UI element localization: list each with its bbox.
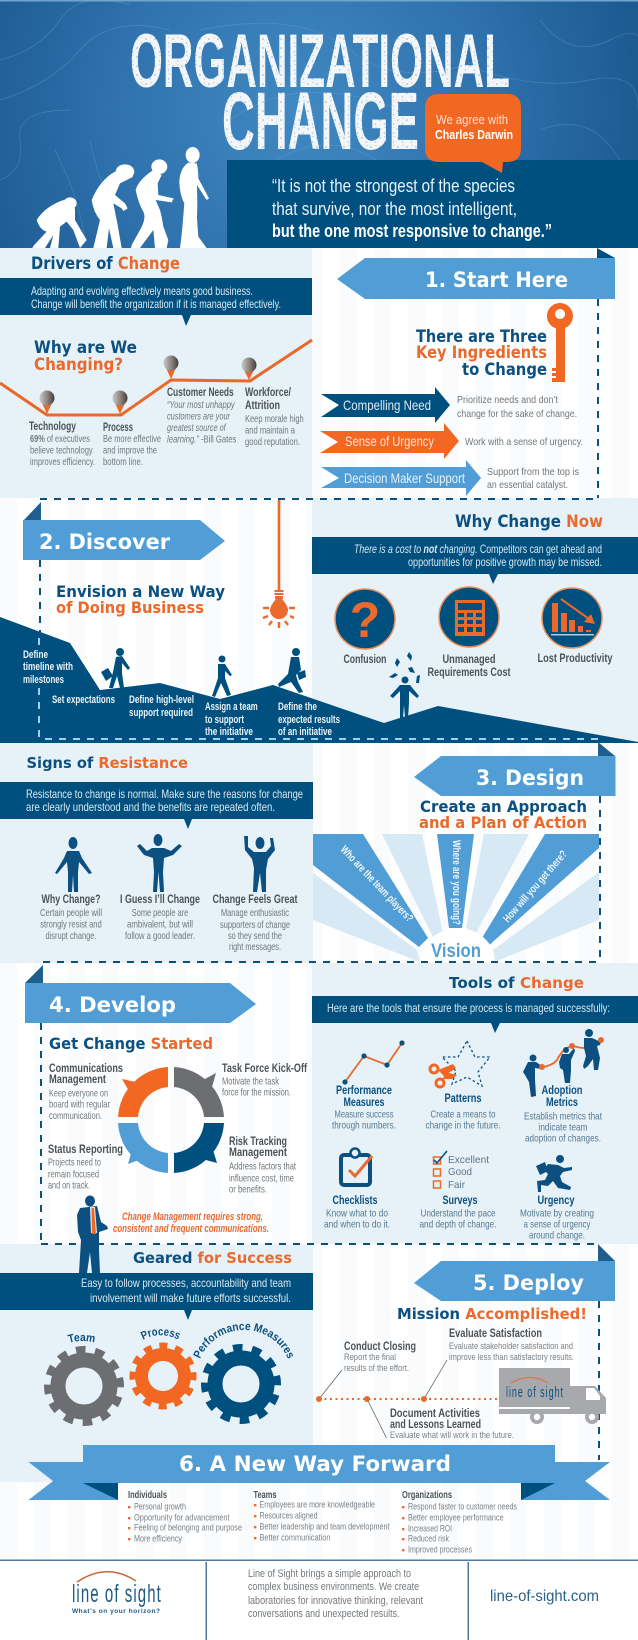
- text: about line of sight: Line of Sight brings a simple approach to: [248, 1568, 411, 1580]
- icon: survey checkboxes: [434, 1151, 489, 1191]
- heading: get change started: Get Change Started: [49, 1034, 213, 1053]
- ray label: team players: Who are the team players?: [338, 844, 415, 925]
- icon: confusion question mark: ?: [350, 592, 380, 648]
- driver: technology: believe technology: [30, 444, 93, 456]
- heading: create an approach: and a Plan of Action: [419, 813, 587, 832]
- icon: scissors and dashed star: [430, 1041, 490, 1087]
- speech bubble: charles darwin: [425, 94, 521, 173]
- heading: geared for success: Geared for Success: [133, 1249, 292, 1267]
- label: unmanaged requirements cost: Unmanaged: [442, 652, 496, 666]
- text: adoption metrics: [524, 1083, 602, 1144]
- quote box: “It is not the strongest of the species: [272, 176, 515, 196]
- text: performance measures: Measures: [344, 1095, 385, 1109]
- driver: workforce attrition: Attrition: [245, 398, 280, 412]
- speech bubble: charles darwin: Charles Darwin: [435, 127, 513, 142]
- donut cycle diagram: [118, 1067, 224, 1173]
- icon: survey checkboxes: Excellent: [448, 1154, 489, 1166]
- text: adoption metrics: Adoption: [542, 1083, 582, 1097]
- list: teams: [254, 1489, 390, 1544]
- icon: evolution of man silhouettes: [32, 147, 209, 248]
- icon: calculator: [439, 587, 499, 647]
- driver: technology: 69% of executives: [30, 433, 90, 445]
- icon: gray gear: [41, 1343, 127, 1429]
- text: conduct closing: Report the final: [344, 1352, 396, 1363]
- panel: drivers of change: [0, 254, 312, 468]
- heading: why are we changing: Changing?: [34, 355, 123, 374]
- text: about line of sight: [248, 1568, 423, 1620]
- arrow: sense of urgency: Sense of Urgency: [345, 433, 434, 449]
- quote box: [227, 160, 638, 248]
- text: conduct closing: [344, 1339, 416, 1374]
- step labels: to support: [205, 714, 244, 726]
- ray label: where are you going: Where are you going?: [450, 840, 462, 925]
- list: individuals: [128, 1489, 242, 1544]
- text: task force kick-off: Motivate the task: [222, 1076, 280, 1088]
- text: risk tracking management: influence cost, time: [229, 1172, 294, 1184]
- list: individuals: Feeling of belonging and purpose: [134, 1522, 242, 1534]
- heading: three key ingredients: to Change: [462, 360, 547, 379]
- banner: 6. a new way forward: 6. A New Way Forward: [179, 1452, 451, 1477]
- text: evaluate satisfaction: improve less than satisfactory results.: [449, 1352, 574, 1363]
- text: why change: Certain people will: [40, 907, 102, 919]
- panel: tools of change: [312, 974, 638, 1242]
- text: status reporting: and on track.: [48, 1180, 90, 1192]
- step labels: Assign a team: [205, 701, 258, 713]
- intro band: Change will benefit the organization if it is managed effectively.: [31, 297, 281, 311]
- text: change feels great: supporters of change: [220, 919, 290, 931]
- text: surveys: [420, 1193, 496, 1230]
- intro band: Adapting and evolving effectively means good business.: [31, 284, 253, 298]
- panel: step 4 develop: [25, 965, 308, 1244]
- text: status reporting: Status Reporting: [48, 1142, 123, 1156]
- step labels: of an initiative: [278, 726, 332, 738]
- label: lost productivity: Lost Productivity: [538, 651, 613, 665]
- text: performance measures: Performance: [336, 1083, 392, 1097]
- text: evaluate satisfaction: Evaluate stakeholder satisfaction and: [449, 1341, 573, 1352]
- driver: process: bottom line.: [103, 456, 143, 468]
- banner: 4. develop: [25, 965, 256, 1023]
- intro band: Easy to follow processes, accountability and team: [81, 1276, 291, 1290]
- step labels: milestones: [23, 674, 64, 686]
- list: organizations: Better employee performance: [408, 1512, 504, 1524]
- line chart: drivers path with pins: [0, 340, 312, 415]
- text: change feels great: [212, 892, 298, 953]
- text: surveys: Understand the pace: [420, 1208, 496, 1220]
- callout: change management requires: consistent and frequent communications.: [113, 1223, 269, 1235]
- text: risk tracking management: [229, 1134, 296, 1196]
- text: urgency: Motivate by creating: [520, 1208, 594, 1220]
- label: confusion: Confusion: [344, 652, 386, 666]
- speech bubble: charles darwin: We agree with: [436, 112, 508, 127]
- text: checklists: [324, 1193, 390, 1230]
- text: patterns: [426, 1091, 500, 1132]
- text: i guess ill change: I Guess I’ll Change: [120, 892, 200, 906]
- banner: 6. a new way forward: [28, 1445, 610, 1500]
- text: adoption metrics: Metrics: [546, 1095, 578, 1109]
- list: organizations: Organizations: [402, 1489, 452, 1501]
- text: about line of sight: laboratories for innovative thinking, relevant: [248, 1595, 423, 1607]
- text: communications management: Management: [49, 1072, 106, 1086]
- arrow: compelling need: Prioritize needs and don’t: [457, 394, 558, 406]
- heading: mission accomplished: Mission Accomplished!: [397, 1305, 587, 1323]
- step labels: Define the: [278, 701, 317, 713]
- panel: step 2 discover: [0, 500, 638, 743]
- heading: why change now: Why Change Now: [455, 512, 603, 531]
- text: why change: disrupt change.: [46, 930, 96, 942]
- step labels: expected results: [278, 714, 340, 726]
- driver: customer needs: “Your most unhappy: [167, 399, 235, 411]
- text: status reporting: remain focused: [48, 1168, 99, 1180]
- icon: survey checkboxes: Fair: [448, 1179, 465, 1191]
- text: i guess ill change: Some people are: [132, 907, 188, 919]
- text: i guess ill change: [120, 892, 200, 942]
- title: change: CHANGE: [222, 76, 419, 167]
- heading: why are we changing: [34, 338, 137, 374]
- icon: orange gear: [130, 1343, 196, 1409]
- panel: geared for success: [0, 1249, 313, 1426]
- text: performance measures: Measure success: [334, 1108, 394, 1120]
- intro band: [0, 1273, 313, 1320]
- text: adoption metrics: adoption of changes.: [525, 1132, 601, 1144]
- text: communications management: [49, 1061, 123, 1122]
- driver: customer needs: learning.” -Bill Gates: [167, 434, 236, 446]
- text: why change: strongly resist and: [40, 918, 102, 930]
- text: about line of sight: conversations and unexpected results.: [248, 1608, 400, 1620]
- icon: truck with logo: line of sight: [506, 1384, 563, 1401]
- text: checklists: Know what to do: [326, 1208, 388, 1220]
- driver: workforce attrition: Workforce/: [245, 385, 291, 399]
- banner: 5. deploy: 5. Deploy: [473, 1271, 584, 1295]
- text: change feels great: Change Feels Great: [212, 892, 298, 906]
- text: change feels great: right messages.: [229, 941, 281, 953]
- driver: process: Process: [103, 420, 133, 434]
- icon: figures pulling rope: [523, 1029, 604, 1097]
- text: why change: Why Change?: [42, 892, 100, 906]
- icon: juggling person: [389, 652, 420, 718]
- logo: line of sight: [72, 1572, 161, 1615]
- quote box: that survive, nor the most intelligent,: [272, 199, 517, 219]
- text: patterns: Create a means to: [430, 1108, 496, 1120]
- banner: 3. design: 3. Design: [476, 766, 584, 790]
- text: patterns: change in the future.: [426, 1120, 500, 1132]
- icon: businessman presenting: [77, 1196, 108, 1273]
- step labels: [23, 649, 340, 738]
- text: document activities: [390, 1406, 514, 1441]
- heading: envision a new way: of Doing Business: [56, 598, 204, 617]
- arrow: compelling need: [321, 387, 577, 423]
- mountain path with steps: [0, 617, 638, 743]
- list: teams: Resources aligned: [260, 1510, 318, 1522]
- text: about line of sight: complex business environments. We create: [248, 1581, 419, 1593]
- text: risk tracking management: Risk Tracking: [229, 1134, 287, 1148]
- text: task force kick-off: force for the mission.: [222, 1086, 291, 1098]
- text: evaluate satisfaction: Evaluate Satisfaction: [449, 1326, 542, 1340]
- logo: line of sight: line of sight: [72, 1580, 161, 1608]
- icon: figure ambivalent: [137, 834, 182, 892]
- heading: three key ingredients: There are Three: [416, 327, 547, 346]
- banner: 3. design: [414, 742, 616, 796]
- label: unmanaged requirements cost: [428, 652, 510, 679]
- heading: three key ingredients: Key Ingredients: [416, 343, 547, 362]
- text: communications management: Keep everyone on: [49, 1088, 108, 1100]
- step labels: the initiative: [205, 726, 253, 738]
- driver: technology: Technology: [29, 419, 76, 433]
- intro band: [312, 996, 638, 1033]
- text: risk tracking management: or benefits.: [229, 1184, 267, 1196]
- footer: [0, 1560, 638, 1640]
- list: organizations: Respond faster to customer needs: [408, 1502, 517, 1512]
- text: evaluate satisfaction: [449, 1326, 574, 1363]
- driver: process: [103, 420, 161, 468]
- text: adoption metrics: indicate team: [538, 1122, 588, 1134]
- intro band: are clearly understood and the benefits are repeated often.: [26, 800, 275, 814]
- text: change feels great: Manage enthusiastic: [221, 907, 289, 919]
- text: task force kick-off: Task Force Kick-Off: [222, 1061, 308, 1075]
- icon: survey checkboxes: Good: [448, 1166, 472, 1178]
- driver: process: and improve the: [103, 444, 157, 456]
- intro band: involvement will make future efforts successful.: [90, 1291, 291, 1305]
- arrow: compelling need: Compelling Need: [343, 397, 431, 413]
- text: urgency: Urgency: [538, 1193, 575, 1207]
- text: i guess ill change: follow a good leader.: [125, 930, 195, 942]
- text: urgency: a sense of urgency: [524, 1218, 591, 1230]
- text: website url: line-of-sight.com: [490, 1588, 599, 1605]
- text: risk tracking management: Address factors that: [229, 1160, 296, 1172]
- text: conduct closing: results of the effort.: [344, 1363, 409, 1374]
- panel: step 5 deploy: [316, 1244, 615, 1460]
- label: vision: Vision: [431, 941, 481, 962]
- text: document activities: and Lessons Learned: [390, 1417, 481, 1431]
- panel: signs of resistance: [0, 754, 313, 953]
- text: surveys: Surveys: [442, 1193, 478, 1207]
- text: communications management: board with regular: [49, 1098, 110, 1110]
- heading: why are we changing: Why are We: [34, 338, 137, 357]
- list: organizations: Improved processes: [408, 1544, 472, 1556]
- intro band: Resistance to change is normal. Make sure the reasons for change: [26, 787, 303, 801]
- logo: line of sight: What’s on your horizon?: [72, 1608, 160, 1615]
- gear label: process: Process: [140, 1329, 180, 1340]
- arrow: sense of urgency: Work with a sense of urgency.: [465, 436, 583, 448]
- text: checklists: Checklists: [332, 1193, 378, 1207]
- text: document activities: Evaluate what will work in the future.: [390, 1430, 514, 1441]
- driver: customer needs: customers are your: [167, 410, 230, 422]
- driver: customer needs: Customer Needs: [167, 385, 234, 399]
- heading: three key ingredients: [416, 327, 547, 379]
- banner: 1. start here: 1. Start Here: [425, 268, 568, 292]
- text: conduct closing: Conduct Closing: [344, 1339, 416, 1353]
- banner: 1. start here: [337, 248, 615, 299]
- step labels: timeline with: [23, 661, 73, 673]
- heading: signs of resistance: Signs of Resistance: [26, 754, 188, 772]
- arrow: sense of urgency: [320, 423, 583, 459]
- driver: customer needs: greatest source of: [167, 422, 226, 434]
- step labels: Define: [23, 649, 48, 661]
- intro band: [312, 537, 638, 584]
- step labels: support required: [129, 707, 193, 719]
- icon: figure enthusiastic: [244, 836, 275, 892]
- arrow: decision maker support: Support from the top is: [487, 466, 579, 478]
- icon: figure shrugging: [55, 837, 92, 892]
- text: status reporting: Projects need to: [48, 1156, 101, 1168]
- heading: create an approach: Create an Approach: [420, 797, 587, 816]
- text: urgency: around change.: [529, 1230, 585, 1242]
- list: individuals: More efficiency: [134, 1534, 182, 1544]
- heading: drivers of change: Drivers of Change: [31, 254, 180, 273]
- icon: clipboard check: [341, 1148, 372, 1185]
- step labels: Set expectations: [52, 694, 115, 706]
- text: urgency: [520, 1193, 594, 1242]
- header panel: [0, 0, 638, 248]
- timeline with milestones: [316, 1360, 500, 1438]
- gear label: team: Team: [67, 1334, 95, 1342]
- ray label: how will you get there: How will you get there?: [501, 848, 570, 925]
- icon: truck with logo: [499, 1368, 606, 1424]
- icon: running man with briefcase: [536, 1155, 572, 1192]
- gear label: performance measures: Performance Measures: [193, 1323, 293, 1358]
- driver: workforce attrition: Keep morale high: [245, 413, 304, 425]
- list: organizations: Increased ROI: [408, 1524, 452, 1534]
- heading: create an approach: [419, 797, 587, 832]
- icon: key: [547, 303, 573, 382]
- panel: step 3 design: [313, 742, 616, 962]
- text: change feels great: so they send the: [228, 930, 282, 942]
- text: patterns: Patterns: [444, 1091, 482, 1105]
- text: why change: [40, 892, 102, 942]
- chart: vision rays: [313, 834, 599, 962]
- icon: hanging light bulb: [263, 500, 295, 628]
- text: status reporting: [48, 1142, 123, 1192]
- list: teams: Better leadership and team development: [260, 1522, 390, 1532]
- driver: process: Be more effective: [103, 433, 161, 445]
- label: unmanaged requirements cost: Requirements Cost: [428, 665, 510, 679]
- driver: technology: improves efficiency.: [30, 456, 95, 468]
- driver: workforce attrition: [245, 385, 304, 448]
- heading: tools of change: Tools of Change: [449, 974, 584, 992]
- quote box: but the one most responsive to change.”: [272, 221, 552, 241]
- banner: 2. discover: 2. Discover: [39, 530, 171, 554]
- text: document activities: Document Activities: [390, 1406, 480, 1420]
- list: organizations: Reduced risk: [408, 1534, 449, 1544]
- list: teams: Employees are more knowledgeable: [260, 1500, 375, 1510]
- text: communications management: Communications: [49, 1061, 123, 1075]
- text: i guess ill change: ambivalent, but will: [127, 918, 193, 930]
- list: individuals: Opportunity for advancement: [134, 1512, 230, 1524]
- text: checklists: and when to do it.: [324, 1218, 390, 1230]
- panel: step 1 start here: [320, 248, 615, 498]
- driver: technology: [29, 419, 95, 468]
- driver: workforce attrition: and maintain a: [245, 424, 295, 436]
- list: individuals: Individuals: [128, 1489, 167, 1501]
- list: teams: Better communication: [260, 1532, 330, 1544]
- arrow: decision maker support: Decision Maker Support: [344, 470, 465, 486]
- banner: 2. discover: [23, 502, 225, 560]
- list: teams: Teams: [254, 1489, 277, 1501]
- icon: declining bar chart: [542, 588, 602, 648]
- list: organizations: [402, 1489, 517, 1556]
- panel: why change now: [312, 512, 638, 679]
- text: communications management: communication.: [49, 1110, 102, 1122]
- callout: change management requires: Change Management requires strong,: [122, 1211, 263, 1223]
- banner: 5. deploy: [414, 1244, 615, 1301]
- text: surveys: and depth of change.: [420, 1218, 496, 1230]
- arrow: decision maker support: an essential catalyst.: [487, 479, 568, 491]
- text: performance measures: [332, 1083, 396, 1132]
- icon: confusion question mark: [335, 589, 395, 649]
- icon: dark blue gear: [198, 1341, 284, 1427]
- intro band: [0, 278, 312, 326]
- text: performance measures: through numbers.: [332, 1120, 396, 1132]
- driver: customer needs: [167, 385, 236, 446]
- intro band: [0, 782, 313, 829]
- text: adoption metrics: Establish metrics that: [524, 1110, 602, 1122]
- heading: envision a new way: Envision a New Way: [56, 582, 226, 601]
- list: individuals: Personal growth: [134, 1502, 186, 1512]
- arrow: compelling need: change for the sake of change.: [457, 408, 577, 420]
- step labels: Define high-level: [129, 694, 194, 706]
- icon: line chart: [342, 1040, 405, 1085]
- driver: workforce attrition: good reputation.: [245, 436, 300, 448]
- text: risk tracking management: Management: [229, 1145, 287, 1159]
- banner: 4. develop: 4. Develop: [49, 993, 176, 1017]
- arrow: decision maker support: [321, 460, 579, 496]
- text: task force kick-off: [222, 1061, 308, 1098]
- callout: change management requires: [113, 1211, 269, 1235]
- heading: envision a new way: [56, 582, 226, 617]
- icon: walking figures: [101, 648, 306, 697]
